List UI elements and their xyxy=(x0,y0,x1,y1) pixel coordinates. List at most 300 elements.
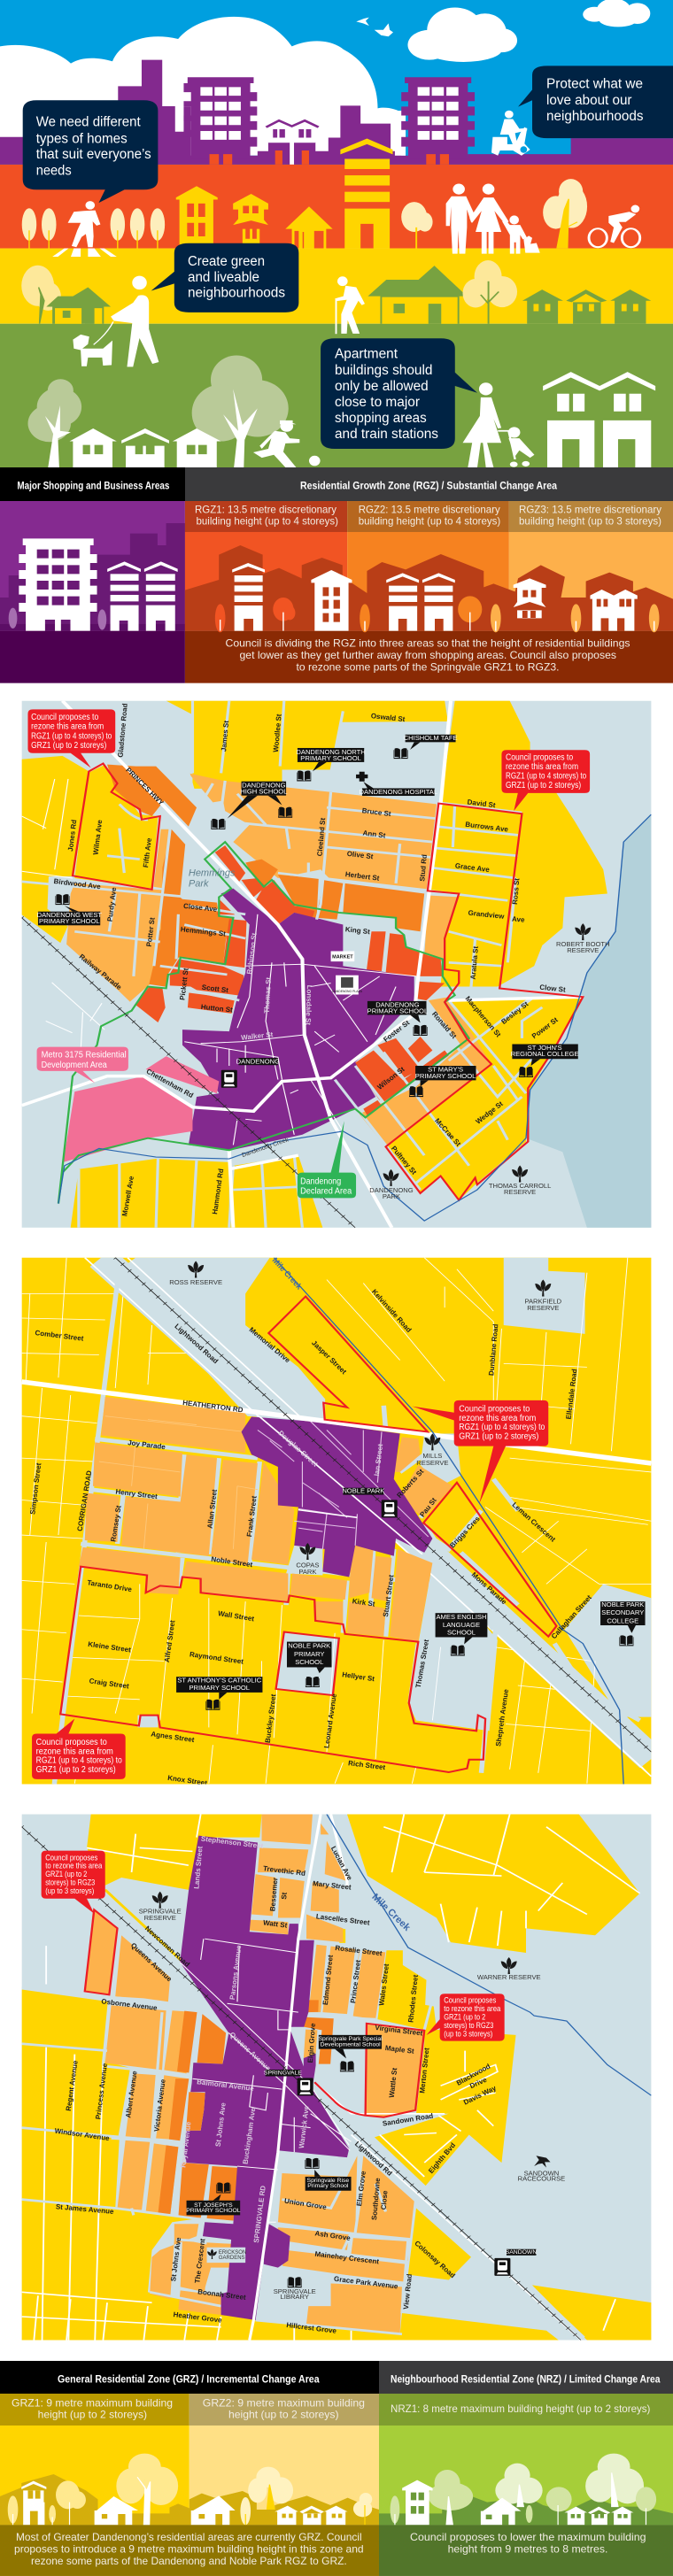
callout: rezone north: rezone this area from xyxy=(459,1414,536,1423)
reserve: copas park: PARK xyxy=(298,1568,316,1576)
label: springvale park special developmental school xyxy=(319,2035,383,2058)
grz1 background xyxy=(0,2426,190,2525)
street labels: Pau St xyxy=(418,1496,438,1519)
rezone boundary west xyxy=(85,1909,118,1994)
purple ground strips xyxy=(0,624,185,631)
callout: rezone west: GRZ1 (up to 2 storeys) xyxy=(31,741,106,751)
three green cottages xyxy=(522,289,651,324)
street labels: Morwell Ave xyxy=(120,1175,135,1217)
street labels: Southdowne xyxy=(370,2177,382,2220)
mother with stroller xyxy=(463,382,534,467)
reserve: ross: ROSS RESERVE xyxy=(169,1278,222,1286)
street labels: McCrae St xyxy=(433,1117,462,1148)
street labels: Leman Crescent xyxy=(511,1500,557,1544)
label: dandenong west primary school: PRIMARY SCHOOL xyxy=(39,917,100,925)
street labels: Lucian Ave xyxy=(329,1845,354,1882)
purple panel poplars xyxy=(9,608,106,630)
street labels: Dandenong Creek xyxy=(241,1137,290,1159)
white townhouse with purple roof xyxy=(267,120,319,165)
panel: hero illustration xyxy=(0,0,673,468)
street labels: Lascelles Street xyxy=(315,1912,370,1927)
bubble shapes xyxy=(23,66,673,449)
street labels: Dunblane Road xyxy=(487,1323,499,1376)
runner with ball xyxy=(253,420,321,467)
label: springvale park special developmental school: Springvale Park Special xyxy=(319,2036,383,2042)
street labels xyxy=(54,1835,498,2335)
street labels: Olive St xyxy=(346,850,374,860)
street labels: Kleine Street xyxy=(88,1640,132,1654)
callout: rezone east: RGZ1 (up to 4 storeys) to xyxy=(506,772,586,782)
icon: sandown station xyxy=(494,2258,510,2276)
street labels xyxy=(53,703,566,1217)
label: st josephs primary school: ST JOSEPH'S xyxy=(194,2202,233,2209)
street labels: Kelvinside Road xyxy=(370,1288,413,1334)
sky xyxy=(0,0,673,165)
street labels: Thomas St xyxy=(263,976,273,1014)
yellow strip along Newcomen Road xyxy=(105,1890,182,1961)
callout: rezone west xyxy=(42,1851,105,1914)
icon: hospital cross xyxy=(356,772,367,782)
street labels: Wilma Ave xyxy=(92,819,104,855)
street labels: CORRIGAN ROAD xyxy=(76,1469,93,1531)
street labels: Newcomen Road xyxy=(143,1924,191,1969)
label: ames english language school: AMES ENGLISH xyxy=(436,1613,486,1621)
street labels: Ann St xyxy=(362,829,386,840)
callout: rezone east: GRZ1 (up to 2 xyxy=(444,2012,485,2021)
street labels: Grace Park Avenue xyxy=(334,2275,398,2291)
icon: sandown racecourse: RACECOURSE xyxy=(518,2175,565,2183)
orange band xyxy=(0,165,673,249)
green band xyxy=(0,324,673,468)
callout: rezone south xyxy=(32,1719,126,1779)
label: st marys primary school: ST MARY'S xyxy=(428,1066,463,1074)
bubble text: apartments: shopping areas xyxy=(335,411,427,426)
label: noble park secondary college: NOBLE PARK xyxy=(601,1600,644,1608)
street labels: Agnes Street xyxy=(151,1730,195,1744)
hiker xyxy=(52,201,117,257)
grz explanation: rezone some parts of the Dandenong and Noble Park RGZ to GRZ. xyxy=(31,2555,347,2567)
logo: market xyxy=(331,951,354,961)
erickson gardens: GARDENS xyxy=(219,2256,245,2261)
rail corridor xyxy=(101,1901,581,2340)
rgz3 label: building height (up to 3 storeys) xyxy=(519,515,661,528)
orange chimneys xyxy=(210,150,449,165)
label: noble park primary school: SCHOOL xyxy=(295,1658,323,1666)
bubble text: different homes: that suit everyone’s xyxy=(36,147,151,162)
label: noble park primary school: NOBLE PARK xyxy=(288,1642,330,1650)
street labels: Burrows Ave xyxy=(465,821,509,834)
street labels: Birdwood Ave xyxy=(53,877,102,891)
callout: rezone east: GRZ1 (up to 2 storeys) xyxy=(506,781,581,791)
light orange blocks xyxy=(79,1397,453,1642)
street labels xyxy=(28,1288,593,1787)
nrz silhouette xyxy=(379,2495,673,2525)
bubble text: different homes: We need different xyxy=(36,115,141,130)
rezone boundary north xyxy=(268,1297,428,1431)
rail white edge xyxy=(85,1258,651,1777)
bubble text: green: neighbourhoods xyxy=(188,286,285,301)
railway line xyxy=(22,1827,581,2340)
nrz explanation: height from 9 metres to 8 metres. xyxy=(448,2542,607,2555)
rezone boundary west xyxy=(73,763,160,890)
yellow small cottage xyxy=(285,206,333,249)
street labels: Edmond Street xyxy=(321,1955,335,2005)
street labels: Chettenham Rd xyxy=(145,1068,195,1099)
light orange blocks xyxy=(85,1814,424,2334)
label: ames english language school: SCHOOL xyxy=(447,1629,476,1637)
callout: rezone east: Council proposes xyxy=(444,1996,497,2004)
label: dandenong primary school xyxy=(367,1000,428,1022)
callout: rezone west: storeys) to RGZ3 xyxy=(45,1878,95,1887)
street labels: Lightwood Road xyxy=(173,1323,220,1365)
street labels: Hemmings St xyxy=(180,925,227,938)
street labels: Jasper Street xyxy=(310,1338,348,1376)
elderly man with cane xyxy=(335,276,365,334)
streets inside activity centre xyxy=(184,914,416,1145)
orange base band xyxy=(185,631,673,683)
white cottages xyxy=(70,428,221,467)
street labels: Noble Street xyxy=(211,1555,253,1569)
label: chisholm tafe xyxy=(404,734,458,750)
street labels: Comber Street xyxy=(35,1329,84,1343)
label: dandenong north primary school: DANDENONG NORTH xyxy=(296,748,366,756)
nrz base band xyxy=(379,2525,673,2576)
nrz1 background xyxy=(379,2426,673,2525)
main roads xyxy=(250,1814,347,2340)
street labels: Watt St xyxy=(263,1918,288,1930)
reserve: robert booth: RESERVE xyxy=(567,946,599,954)
erickson gardens: ERICKSON xyxy=(219,2250,246,2256)
street labels: Stud Rd xyxy=(418,854,429,882)
creek label: Mile Creek xyxy=(271,1255,305,1292)
street labels: Drive xyxy=(468,2076,489,2090)
callout: rezone west xyxy=(27,709,115,768)
grz1 trees xyxy=(8,2454,178,2524)
reserve: thomas carroll xyxy=(489,1166,551,1196)
street labels: Merton Street xyxy=(418,2048,431,2094)
thin lines west of rail and in yellow xyxy=(22,779,104,1074)
street labels: SPRINGVALE RD xyxy=(252,2185,267,2243)
street labels: Prince Street xyxy=(349,1959,362,2004)
street labels: Albert Avenue xyxy=(124,2070,139,2118)
reserve: thomas carroll: THOMAS CARROLL xyxy=(489,1182,551,1190)
street labels: Pultney St xyxy=(390,1145,418,1176)
label: st josephs primary school xyxy=(186,2194,241,2215)
reserve: springvale: SPRINGVALE xyxy=(139,1908,182,1916)
street labels: Fifth Ave xyxy=(142,837,153,868)
street labels: Wedge St xyxy=(475,1099,505,1126)
rgz1 label: building height (up to 4 storeys) xyxy=(197,515,338,528)
panel: business and residential growth zone legend xyxy=(0,467,673,683)
street labels: Lonsdale St xyxy=(304,985,313,1025)
apartment building right xyxy=(395,77,475,158)
logo: dandenong plaza xyxy=(332,976,363,994)
purple silhouette xyxy=(0,523,185,631)
street labels: Rich Street xyxy=(348,1759,386,1771)
cottage windows xyxy=(83,445,207,454)
label: st johns regional college: REGIONAL COLLEGE xyxy=(511,1050,579,1058)
bubble text: apartments: only be allowed xyxy=(335,379,429,394)
scooter rider xyxy=(491,111,530,156)
reserve: robert booth: ROBERT BOOTH xyxy=(556,940,610,948)
street labels: Hellyer St xyxy=(342,1670,375,1683)
icon: sandown racecourse: SANDOWN xyxy=(524,2169,559,2177)
header bars xyxy=(0,467,673,501)
street labels: Regent Avenue xyxy=(65,2059,80,2111)
grz2 label: GRZ2: 9 metre maximum building xyxy=(203,2396,365,2409)
street labels: Hammond Rd xyxy=(211,1168,225,1215)
mile creek xyxy=(274,1258,623,1784)
label: dandenong north primary school xyxy=(296,748,366,771)
street labels: Macpherson St xyxy=(464,995,503,1039)
hero scene xyxy=(0,0,673,468)
rgz2 label: building height (up to 4 storeys) xyxy=(359,515,500,528)
bubble text: apartments: buildings should xyxy=(335,363,432,378)
label: sandown station: SANDOWN xyxy=(506,2249,537,2256)
reserve: mills: RESERVE xyxy=(416,1459,448,1467)
street labels: Stephenson Street xyxy=(200,1835,264,1850)
street labels: Walker St xyxy=(241,1030,274,1042)
street labels: Potter St xyxy=(145,917,157,947)
street labels: Ave xyxy=(512,915,525,924)
local streets xyxy=(22,701,542,1228)
mid orange blocks xyxy=(158,2000,334,2243)
street labels: Sandown Road xyxy=(382,2112,434,2128)
reserve: dandenong park xyxy=(369,1169,414,1200)
street labels: Ian Street xyxy=(373,1443,384,1477)
street labels: Rosalie Street xyxy=(335,1944,383,1957)
reserve: ross xyxy=(169,1261,222,1286)
street labels: The Crescent xyxy=(193,2238,206,2284)
street labels: Heather Grove xyxy=(173,2310,223,2325)
callout: rezone east: Council proposes to xyxy=(506,753,573,763)
street labels: Allan Street xyxy=(206,1489,219,1529)
label: noble park primary school: PRIMARY xyxy=(294,1650,324,1658)
label: noble park secondary college: COLLEGE xyxy=(607,1616,638,1624)
zone scene xyxy=(0,501,673,683)
bubble text: green: and liveable xyxy=(188,270,259,285)
street labels: David St xyxy=(467,798,496,809)
street labels: Hutton St xyxy=(200,1003,234,1014)
rgz explanation: get lower as they get further away from shopping areas. Council also proposes xyxy=(239,649,616,661)
yellow street lines xyxy=(22,1814,640,2340)
dark purple base xyxy=(0,631,185,683)
street labels: Colonsay Road xyxy=(413,2240,457,2279)
main roads xyxy=(22,701,583,1228)
railway line xyxy=(22,918,355,1228)
nrz trees xyxy=(391,2454,656,2524)
callout: rezone west: (up to 3 storeys) xyxy=(45,1886,94,1895)
purple activity centre xyxy=(182,889,414,1150)
rgz3 small block xyxy=(514,578,546,618)
street labels: Rhodes Street xyxy=(406,1974,420,2023)
label: dandenong high school xyxy=(227,781,287,819)
nrz cottage xyxy=(476,2498,521,2525)
street labels: Balmoral Avenue xyxy=(197,2078,255,2093)
grz1 townhouse xyxy=(21,2481,46,2525)
street labels: HEATHERTON RD xyxy=(182,1399,244,1414)
label: st anthonys primary school: PRIMARY SCHOOL xyxy=(189,1684,250,1692)
purple activity centre xyxy=(242,1416,432,1577)
rezone boundary east xyxy=(423,1483,556,1637)
callout: rezone north: RGZ1 (up to 4 storeys) to xyxy=(459,1423,545,1432)
street labels: Bruce St xyxy=(361,806,391,818)
red orange blocks xyxy=(135,845,449,1115)
street labels: St xyxy=(280,1892,289,1900)
label: ames english language school: LANGUAGE xyxy=(443,1621,480,1629)
purple skyline xyxy=(0,60,673,165)
street labels: Trevethic Rd xyxy=(263,1864,306,1878)
callout: metro 3175 xyxy=(37,1047,128,1083)
street labels: Jones Rd xyxy=(66,819,78,852)
rgz1 twin tower xyxy=(232,563,265,631)
street labels: Aratula St xyxy=(469,945,480,980)
rezone boundary east xyxy=(314,2024,424,2117)
label: dandenong primary school: PRIMARY SCHOOL xyxy=(367,1006,428,1014)
twin townhouses purple panel xyxy=(107,561,178,631)
school icons xyxy=(216,2061,354,2194)
label: dandenong hospital xyxy=(360,782,437,796)
street labels: Memorial Drive xyxy=(248,1326,292,1365)
street labels: Mary Street xyxy=(313,1879,352,1892)
nrz apartment xyxy=(402,2480,433,2525)
library: SPRINGVALE xyxy=(274,2287,316,2295)
grz2 trees xyxy=(240,2467,372,2525)
bubble text: different homes: needs xyxy=(36,163,72,178)
street labels: Close xyxy=(380,2190,390,2210)
callout: rezone west: rezone this area from xyxy=(31,722,104,732)
rezone school boundary xyxy=(276,1632,339,1695)
rgz1 apartment block xyxy=(311,570,352,631)
street labels: St James Avenue xyxy=(56,2202,114,2216)
callout: rezone south: GRZ1 (up to 2 storeys) xyxy=(36,1765,116,1775)
street labels: Mons Parade xyxy=(470,1570,508,1607)
street labels: Romsey St xyxy=(109,1505,123,1542)
purple activity centre xyxy=(180,1836,349,2320)
street labels: View Road xyxy=(402,2273,414,2310)
street labels: Knox Street xyxy=(167,1774,208,1787)
bubble text: apartments: and train stations xyxy=(335,427,438,442)
street labels: Clow St xyxy=(539,983,566,994)
street labels: Warwick Ave xyxy=(298,2105,311,2149)
label: dandenong high school: HIGH SCHOOL xyxy=(240,788,287,796)
rail corridor xyxy=(101,1258,651,1759)
white trunk left tree xyxy=(45,405,71,467)
street labels: Davis Way xyxy=(462,2084,498,2107)
callout: rezone east: rezone this area from xyxy=(506,762,578,772)
callout: rezone east: to rezone this area xyxy=(444,2004,501,2013)
street labels: Cleeland St xyxy=(316,817,327,857)
reserve: parkfield: RESERVE xyxy=(527,1304,559,1312)
rgz2 label: RGZ2: 13.5 metre discretionary xyxy=(359,503,500,515)
erickson gardens xyxy=(207,2248,246,2263)
rgz explanation: Council is dividing the RGZ into three areas so that the height of residential buildings xyxy=(225,637,630,650)
rgz2 twin towers xyxy=(386,573,455,631)
green cottage left xyxy=(46,287,111,324)
street labels: Bessemer xyxy=(268,1878,280,1912)
reserve: springvale: RESERVE xyxy=(144,1914,176,1922)
grz1 label band xyxy=(0,2394,190,2426)
street labels: Wattle St xyxy=(388,2067,398,2098)
reserve: mills: MILLS xyxy=(422,1452,442,1460)
grz2 trunks xyxy=(245,2485,365,2525)
street labels: Woodlee St xyxy=(272,713,283,752)
street labels: Royal Avenue xyxy=(179,2121,193,2168)
street labels: Power St xyxy=(530,1015,560,1040)
bubble text: protect: Protect what we xyxy=(546,77,643,92)
street labels: St Johns Ave xyxy=(214,2102,228,2148)
icon: sandown racecourse xyxy=(518,2156,565,2183)
reserve: copas park: COPAS xyxy=(296,1561,319,1569)
callout: rezone east: storeys) to RGZ3 xyxy=(444,2021,493,2030)
bubble text: apartments: Apartment xyxy=(335,347,398,362)
label: noble park primary school xyxy=(287,1642,332,1673)
map: Noble Park xyxy=(22,1255,651,1787)
street labels: Grace Ave xyxy=(454,861,491,874)
mile creek xyxy=(327,1814,651,2095)
creek label: Mile Creek xyxy=(369,1892,413,1934)
rgz trees xyxy=(215,596,659,632)
street labels: PRINCES HWY xyxy=(124,766,166,807)
road overlay in orange zone xyxy=(99,1416,258,1549)
rgz explanation: to rezone some parts of the Springvale GRZ1 to RGZ3. xyxy=(296,660,560,673)
street labels: Mainehey Crescent xyxy=(314,2250,380,2266)
callout: metro 3175: Development Area xyxy=(42,1060,107,1070)
street labels: Elm Grove xyxy=(355,2170,367,2207)
street labels: Windsor Avenue xyxy=(54,2127,111,2142)
collector streets xyxy=(22,1842,435,2334)
rgz2 background xyxy=(347,532,509,631)
label: st josephs primary school: PRIMARY SCHOOL xyxy=(186,2208,241,2214)
street labels: Elgin Grove xyxy=(306,2023,317,2063)
main and collector roads xyxy=(54,1284,640,1784)
grz1 trunks xyxy=(13,2477,151,2525)
nrz1 label: NRZ1: 8 metre maximum building height (up to 2 storeys) xyxy=(391,2402,650,2415)
callout: rezone west: Council proposes to xyxy=(31,713,98,722)
callout: dandenong declared area xyxy=(298,1121,356,1198)
pale green tree centre xyxy=(192,356,289,442)
street labels: Hillcrest Grove xyxy=(286,2321,337,2335)
light orange blocks xyxy=(66,773,491,1146)
nrz trunks xyxy=(395,2472,646,2525)
label: springvale park special developmental school: Developmental School xyxy=(321,2042,381,2048)
yellow tower xyxy=(340,138,393,249)
street labels: Wilson St xyxy=(375,1065,406,1091)
icon: noble park station xyxy=(382,1500,398,1517)
cyclist xyxy=(589,205,640,247)
street labels: Stuart Street xyxy=(382,1574,396,1617)
street labels: Ash Grove xyxy=(314,2229,352,2242)
reserve: dandenong park: DANDENONG xyxy=(369,1186,414,1194)
label: st anthonys primary school xyxy=(176,1676,262,1700)
callout: rezone north xyxy=(412,1400,548,1503)
callout: rezone east xyxy=(501,750,590,811)
cloud top right xyxy=(583,0,650,27)
logo: market: MARKET xyxy=(332,955,353,960)
street labels: Frank Street xyxy=(245,1495,259,1538)
rezone boundary large xyxy=(60,1567,485,1772)
street labels: James St xyxy=(220,720,230,752)
street labels: Oswald St xyxy=(370,712,406,723)
library: LIBRARY xyxy=(281,2293,309,2301)
street labels: Henry Street xyxy=(115,1487,159,1500)
reserve: warner xyxy=(477,1957,541,1981)
nrz small houses xyxy=(564,2507,633,2525)
street labels: Besley St xyxy=(499,999,530,1026)
mid orange blocks xyxy=(107,765,424,987)
reserve: dandenong park: PARK xyxy=(383,1192,400,1200)
bubble text: different homes: types of homes xyxy=(36,131,128,146)
